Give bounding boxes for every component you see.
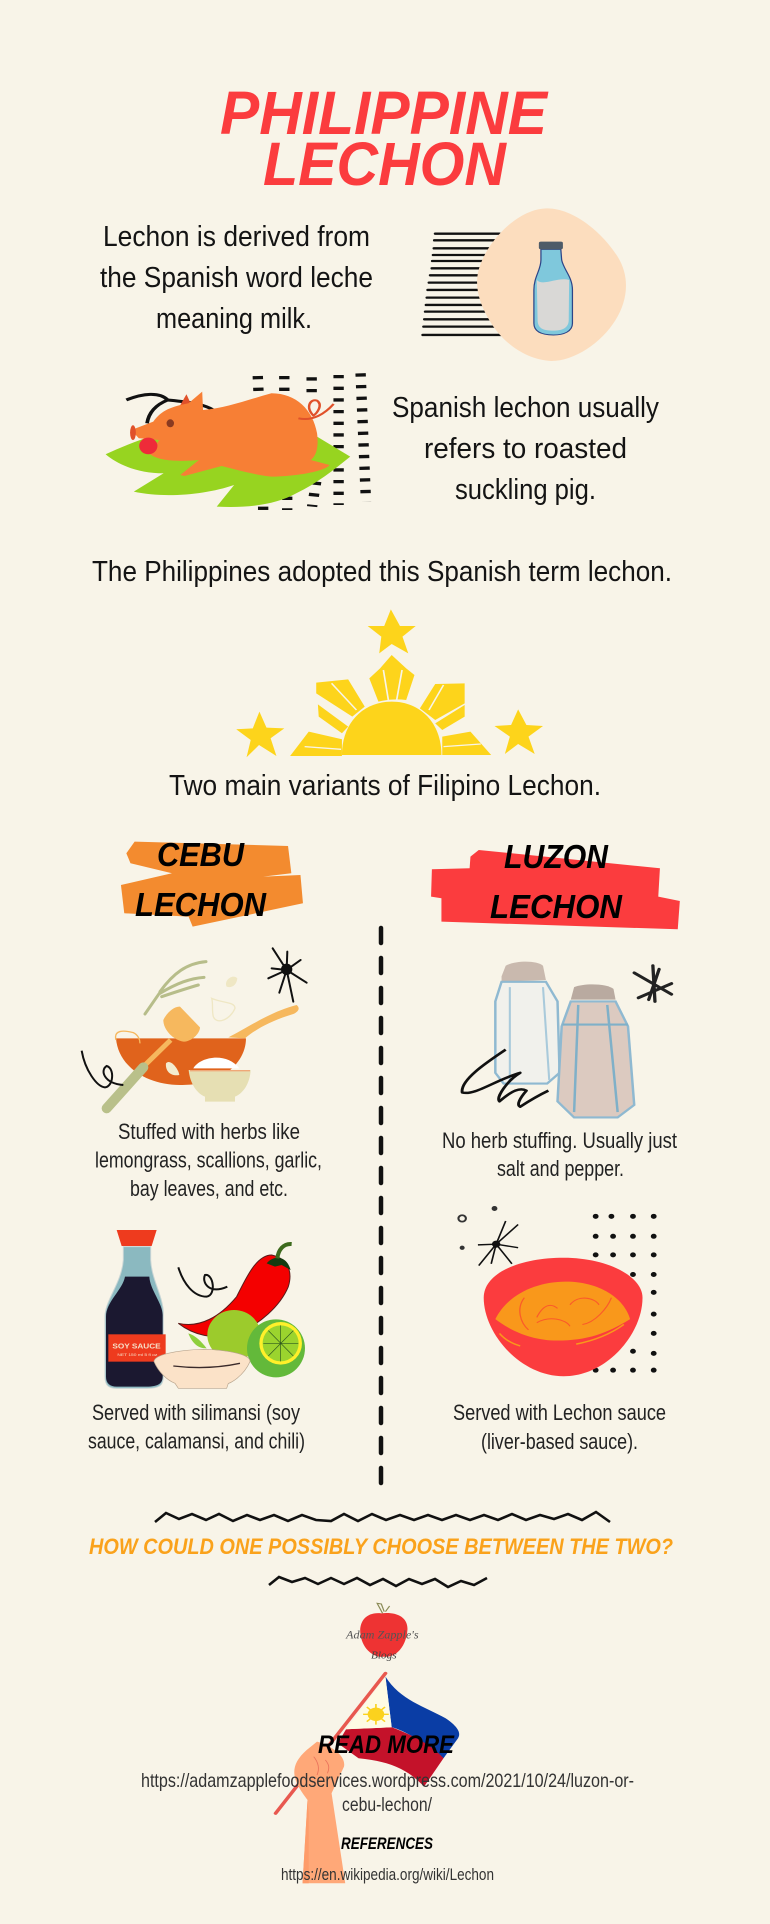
zigzag divider bottom (269, 1577, 487, 1587)
logo: apple: Blogs (371, 1650, 397, 1661)
callout question: HOW COULD ONE POSSIBLY CHOOSE BETWEEN THE TWO? (89, 1534, 673, 1559)
text block: luzon seasoning: salt and pepper. (497, 1156, 624, 1181)
text block: luzon seasoning (442, 1128, 678, 1181)
text block: luzon sauce: Served with Lechon sauce (453, 1400, 666, 1425)
text block: cebu stuffing (95, 1119, 322, 1201)
text block: lechon origin (100, 221, 373, 335)
icon: wok with herbs (82, 948, 307, 1108)
logo: apple (345, 1603, 419, 1661)
text block: lechon origin: meaning milk. (156, 303, 312, 335)
link: read more url (141, 1770, 634, 1816)
heading: cebu lechon (121, 836, 303, 927)
heading: references: REFERENCES (341, 1834, 434, 1853)
heading: luzon lechon: LUZON (504, 838, 609, 875)
heading: cebu lechon: LECHON (135, 886, 267, 923)
text block: lechon origin: Lechon is derived from (103, 221, 370, 253)
text block: two variants: Two main variants of Filipino Lechon. (169, 770, 601, 802)
zigzag divider top (155, 1512, 610, 1522)
text block: spanish lechon (392, 392, 659, 506)
logo: apple: Adam Zapple's (345, 1629, 419, 1641)
heading: cebu lechon: CEBU (157, 836, 245, 873)
text block: cebu sauce (88, 1400, 305, 1454)
text block: lechon origin: the Spanish word leche (100, 262, 373, 294)
divider: dashed column line (379, 928, 383, 1487)
icon: soy sauce, chili and calamansi: NET 150 ml 5 fl oz (117, 1353, 158, 1357)
title (220, 79, 549, 198)
icon: soy sauce, chili and calamansi: SOY SAUCE (112, 1342, 161, 1351)
text block: cebu sauce: Served with silimansi (soy (92, 1400, 301, 1425)
icon: salt and pepper shakers (462, 962, 672, 1117)
heading: read more: READ MORE (318, 1731, 455, 1759)
icon: bowl of lechon sauce (458, 1206, 654, 1376)
text block: cebu stuffing: lemongrass, scallions, garlic, (95, 1148, 322, 1172)
link: read more url: https://adamzapplefoodservices.wordpress.com/2021/10/24/luzon-or- (141, 1770, 634, 1792)
text block: luzon sauce: (liver-based sauce). (481, 1429, 638, 1454)
text block: luzon sauce (453, 1400, 666, 1454)
link: wikipedia reference: https://en.wikipedia.org/wiki/Lechon (281, 1865, 494, 1884)
link: read more url: cebu-lechon/ (342, 1794, 432, 1816)
icon: soy sauce, chili and calamansi (105, 1230, 305, 1388)
icon: hand holding philippine flag (276, 1673, 459, 1883)
text block: cebu sauce: sauce, calamansi, and chili) (88, 1428, 305, 1454)
text block: spanish lechon: refers to roasted (424, 433, 627, 465)
text block: luzon seasoning: No herb stuffing. Usually just (442, 1128, 678, 1153)
title: PHILIPPINE (220, 79, 549, 147)
title: LECHON (263, 130, 508, 198)
heading: luzon lechon (431, 838, 680, 929)
text block: spanish lechon: Spanish lechon usually (392, 392, 659, 424)
text block: philippines adoption: The Philippines adopted this Spanish term lechon. (92, 556, 672, 588)
icon: roast pig on leaf (106, 373, 366, 512)
text block: cebu stuffing: Stuffed with herbs like (118, 1119, 300, 1144)
heading: luzon lechon: LECHON (490, 888, 623, 925)
text block: cebu stuffing: bay leaves, and etc. (130, 1176, 288, 1201)
text block: spanish lechon: suckling pig. (455, 474, 596, 506)
icon: milk bottle with stripes (423, 208, 626, 361)
icon: philippine sun and stars (236, 609, 543, 757)
